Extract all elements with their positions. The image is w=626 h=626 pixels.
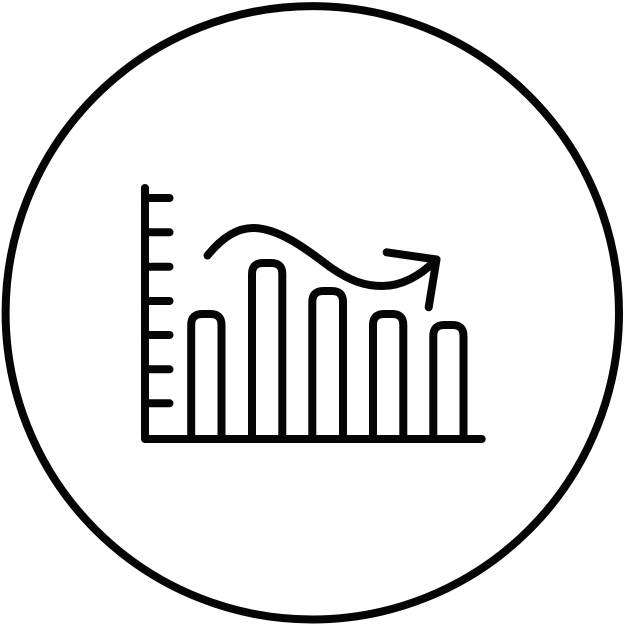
axis ticks <box>145 198 170 403</box>
trend arrow <box>208 228 436 307</box>
bars <box>191 263 463 437</box>
axes <box>145 188 482 439</box>
